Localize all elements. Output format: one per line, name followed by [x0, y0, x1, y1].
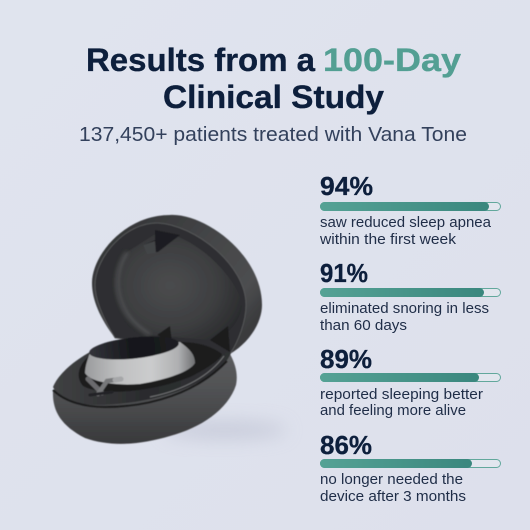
title: Clinical Study	[163, 79, 384, 115]
device prongs	[88, 379, 121, 395]
title: Results from a	[86, 42, 315, 78]
progress bar 89%	[320, 373, 500, 382]
stat: 86%: device after 3 months	[320, 488, 466, 505]
device dark top	[88, 333, 180, 363]
case base rim	[53, 342, 231, 405]
title: 100-Day	[323, 42, 461, 78]
lid inner wall	[118, 231, 242, 340]
case base bowl	[53, 354, 237, 444]
stat: 94%: within the first week	[319, 231, 457, 248]
stat: 86%	[320, 430, 500, 505]
progress bar 91%	[320, 288, 500, 297]
product image: open charging case	[53, 215, 287, 444]
stat: 94%: 94%	[320, 171, 373, 201]
stat: 91%	[320, 258, 500, 334]
base cavity	[79, 342, 222, 392]
stat: 91%: than 60 days	[320, 317, 407, 334]
stat: 89%: 89%	[320, 344, 372, 374]
stat: 89%: and feeling more alive	[320, 402, 466, 419]
stat: 86%: 86%	[320, 430, 372, 460]
stat: 94%: saw reduced sleep apnea	[320, 214, 492, 231]
silver device body	[85, 342, 195, 385]
stat: 89%: reported sleeping better	[320, 386, 483, 403]
case shadow	[163, 421, 287, 439]
subtitle: 137,450+ patients treated with Vana Tone	[79, 124, 467, 146]
hinge tabs	[157, 326, 172, 342]
lid latch	[143, 230, 180, 253]
stat: 94%	[319, 171, 500, 248]
title	[86, 42, 461, 115]
stat: 89%	[320, 344, 500, 419]
progress bar 86%	[320, 459, 500, 468]
stat: 86%: no longer needed the	[320, 471, 463, 488]
stat: 91%: eliminated snoring in less	[320, 300, 489, 317]
case lid	[92, 215, 262, 354]
stat: 91%: 91%	[320, 258, 368, 288]
progress bar 94%	[320, 202, 500, 211]
